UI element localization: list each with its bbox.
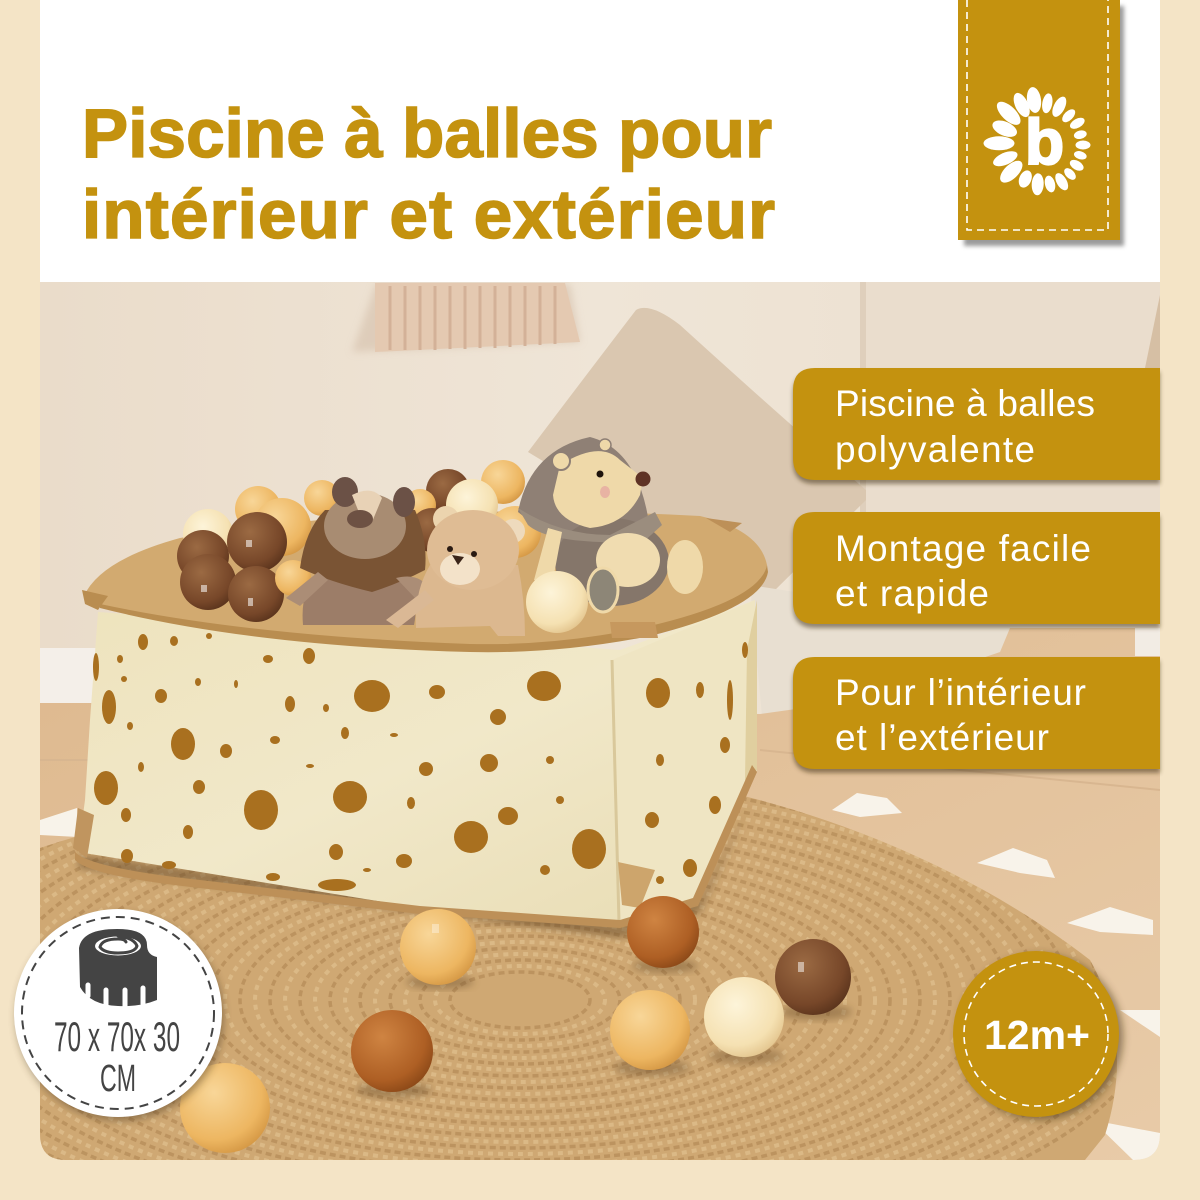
pool body (78, 600, 757, 922)
floor (40, 628, 1160, 1160)
dimensions badge: 70 x 70x 30 (54, 1013, 180, 1060)
feature label: Pour l’intérieur et l’extérieur (793, 657, 1160, 773)
hedgehog plush (518, 437, 703, 612)
feature label: Pour l’intérieur et l’extérieur: et l’extérieur (835, 717, 1049, 758)
white title panel (40, 0, 1160, 282)
polka dots (93, 633, 748, 891)
dimensions badge: CM (100, 1058, 136, 1100)
feature label: Piscine à balles polyvalente: Piscine à balles (835, 383, 1095, 424)
photo: room with ball pool (0, 282, 1160, 1200)
jute rug (40, 796, 1117, 1160)
feature label: Montage facile et rapide: et rapide (835, 573, 989, 614)
dimensions badge (14, 909, 224, 1121)
large cushion (528, 308, 866, 595)
pool base trim (75, 765, 757, 928)
icon: sunflower logo: b (1025, 106, 1064, 178)
title: Piscine à balles pour (82, 95, 772, 172)
age badge 12m+: 12m+ (984, 1012, 1090, 1058)
feature label: Piscine à balles polyvalente: polyvalente (835, 429, 1035, 470)
loose balls (180, 896, 852, 1153)
feature label: Pour l’intérieur et l’extérieur: Pour l’intérieur (835, 672, 1086, 713)
feature label: Montage facile et rapide: Montage facile (835, 528, 1091, 569)
handles (618, 862, 655, 908)
lower cushion (759, 586, 776, 595)
front cream ball (526, 571, 588, 633)
age badge 12m+ (953, 951, 1123, 1120)
feature label: Montage facile et rapide (793, 512, 1160, 628)
feature label: Piscine à balles polyvalente (793, 368, 1160, 484)
pool shadow (75, 828, 739, 942)
lion plush (286, 477, 430, 625)
tag stitching (967, 0, 1108, 230)
ball pool (73, 437, 768, 938)
brand tag (958, 0, 1124, 246)
icon: sunflower logo (984, 86, 1090, 196)
icon: tape measure (79, 929, 157, 1008)
wall hanging (352, 283, 580, 352)
tassels on rug edge (40, 793, 1160, 1160)
balls inside pool (177, 460, 541, 622)
pool rim (84, 511, 767, 646)
title (82, 95, 775, 253)
bear plush (386, 506, 525, 636)
title: intérieur et extérieur (82, 176, 775, 253)
wall (40, 282, 1160, 722)
